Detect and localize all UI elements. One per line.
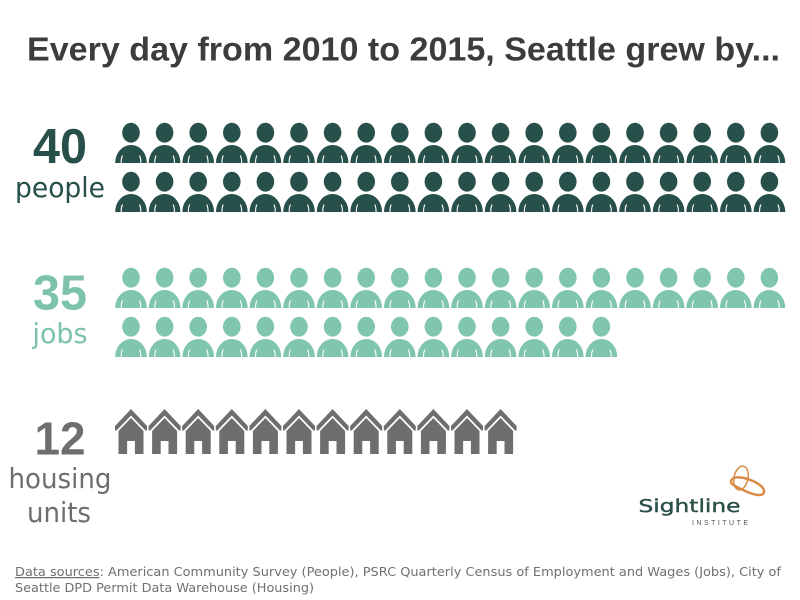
label: 12 housing units: housing xyxy=(8,463,112,495)
label: 40 people: 40 xyxy=(33,120,87,174)
logo: Sightline Institute: Sightline xyxy=(638,496,740,517)
data sources: Data sources: American Community Survey (People), PSRC Quarterly Census of Employment and Wages (Jobs), City of xyxy=(15,564,782,579)
icons: people, 40 xyxy=(115,123,785,212)
label: 35 jobs xyxy=(32,266,87,350)
logo: Sightline Institute: INSTITUTE xyxy=(692,520,748,527)
label: 12 housing units: units xyxy=(27,497,91,529)
icon: orange rings xyxy=(731,465,764,495)
label: 12 housing units: 12 xyxy=(34,412,86,464)
label: 35 jobs: jobs xyxy=(32,318,87,350)
data sources xyxy=(15,564,782,595)
label: 12 housing units xyxy=(8,412,112,529)
logo: Sightline Institute xyxy=(638,465,764,527)
title: Every day from 2010 to 2015, Seattle grew by... xyxy=(27,30,780,68)
icons: housing units, 12 xyxy=(115,409,517,454)
label: 35 jobs: 35 xyxy=(33,266,87,320)
label: 40 people xyxy=(15,120,105,204)
label: 40 people: people xyxy=(15,172,105,204)
data sources: Seattle DPD Permit Data Warehouse (Housing) xyxy=(15,580,314,595)
icons: jobs, 35 xyxy=(115,268,785,358)
